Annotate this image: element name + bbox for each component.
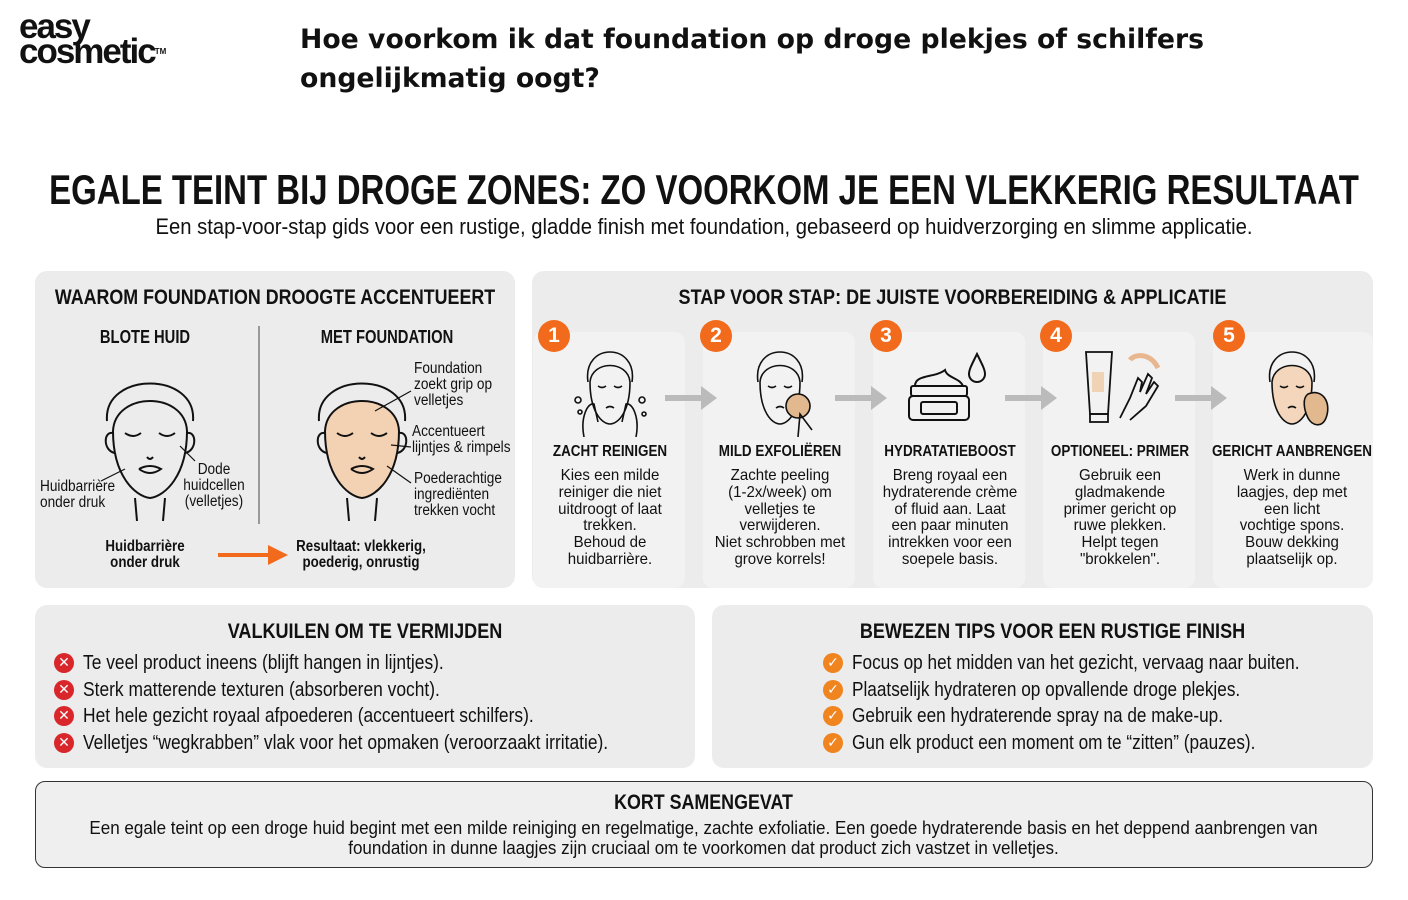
list: ✓ — [827, 682, 839, 698]
step text: huidbarrière. — [568, 551, 652, 568]
step 5: 5 — [1223, 324, 1235, 347]
summary text: Een egale teint op een droge huid begint met een milde reiniging en regelmatige, zachte exfoliatie. Een goede hydraterende basis en het deppend aanbrengen van — [89, 817, 1318, 838]
label: dead cells: (velletjes) — [185, 493, 243, 510]
label: powder: ingrediënten — [414, 486, 489, 503]
icon: cream jar — [908, 352, 986, 421]
heading: BEWEZEN TIPS VOOR EEN RUSTIGE FINISH — [860, 620, 1245, 643]
step text: Kies een milde — [561, 467, 659, 484]
step 3: Breng royaal een — [893, 467, 1007, 484]
step 5 — [1212, 320, 1372, 568]
list: ✓ — [827, 655, 839, 671]
step 5: vochtige spons. — [1240, 517, 1344, 534]
subheading bare skin: BLOTE HUID — [100, 327, 190, 347]
list: ✕ — [58, 682, 70, 698]
step 2: Niet schrobben met — [715, 534, 845, 551]
step 2: Zachte peeling — [731, 467, 829, 484]
panel: pitfalls — [35, 605, 695, 768]
step 3: een paar minuten — [891, 517, 1009, 534]
step 4: 4 — [1050, 324, 1062, 347]
icon: sponge application — [1268, 351, 1329, 426]
step text: reiniger die niet — [559, 484, 661, 501]
list: Te veel product ineens (blijft hangen in lijntjes). — [83, 652, 444, 674]
label: powder — [414, 470, 502, 519]
list — [823, 652, 1299, 754]
label: grip: zoekt grip op — [414, 376, 492, 393]
header question: Hoe voorkom ik dat foundation op droge plekjes of schilfers — [300, 24, 1204, 55]
heading: STAP VOOR STAP: DE JUISTE VOORBEREIDING & APPLICATIE — [679, 286, 1226, 309]
step 1: 1 — [548, 324, 560, 347]
label: grip: Foundation — [414, 360, 482, 377]
label: barrier: Huidbarrière — [40, 478, 115, 495]
icon: bare face — [100, 382, 196, 521]
icon: face with foundation — [316, 382, 412, 521]
heading: VALKUILEN OM TE VERMIJDEN — [228, 620, 502, 643]
logo — [19, 7, 166, 71]
step 3: intrekken voor een — [888, 534, 1012, 551]
list: ✕ — [58, 655, 70, 671]
step 2: (1-2x/week) om — [728, 484, 832, 501]
header question: ongelijkmatig oogt? — [300, 63, 600, 94]
step text: trekken. — [583, 517, 637, 534]
bottom left label: onder druk — [110, 554, 180, 571]
step 2: verwijderen. — [739, 517, 821, 534]
subtitle: Een stap-voor-stap gids voor een rustige, gladde finish met foundation, gebaseerd op huidverzorging en slimme applicatie. — [156, 214, 1252, 239]
summary box — [35, 781, 1373, 868]
list: Focus op het midden van het gezicht, vervaag naar buiten. — [852, 652, 1299, 674]
step 2: 2 — [710, 324, 722, 347]
step 4: Gebruik een — [1079, 467, 1161, 484]
list: Gebruik een hydraterende spray na de make-up. — [852, 705, 1223, 727]
summary text — [89, 817, 1318, 858]
summary heading: KORT SAMENGEVAT — [614, 791, 793, 814]
result label — [296, 538, 426, 571]
list: ✕ — [58, 708, 70, 724]
step 3: of fluid aan. Laat — [894, 501, 1006, 518]
list: Het hele gezicht royaal afpoederen (accentueert schilfers). — [83, 705, 534, 727]
panel: step by step — [532, 271, 1373, 588]
subheading with foundation: MET FOUNDATION — [321, 327, 453, 347]
step 5: een licht — [1264, 501, 1320, 518]
arrow — [218, 545, 288, 565]
step 5: Bouw dekking — [1245, 534, 1339, 551]
list: ✕ — [58, 735, 70, 751]
label: grip — [414, 360, 492, 409]
step 2: MILD EXFOLIËREN — [719, 443, 841, 460]
step 4: ruwe plekken. — [1074, 517, 1166, 534]
label: lines: Accentueert — [412, 423, 485, 440]
step text: uitdroogt of laat — [558, 501, 662, 518]
arrow 2 — [835, 386, 887, 410]
label: grip: velletjes — [414, 392, 463, 409]
step 4: gladmakende — [1075, 484, 1165, 501]
label: powder: Poederachtige — [414, 470, 502, 487]
list: Velletjes “wegkrabben” vlak voor het opmaken (veroorzaakt irritatie). — [83, 732, 608, 754]
heading: WAAROM FOUNDATION DROOGTE ACCENTUEERT — [55, 286, 495, 309]
arrow 4 — [1175, 386, 1227, 410]
step 3: HYDRATATIEBOOST — [884, 443, 1016, 460]
label: powder: trekken vocht — [414, 502, 495, 519]
logo: cosmeticTM — [19, 32, 166, 71]
arrow 3 — [1005, 386, 1057, 410]
list: Gun elk product een moment om te “zitten” (pauzes). — [852, 732, 1255, 754]
result label: poederig, onrustig — [302, 554, 419, 571]
panel: why foundation accentuates dryness — [35, 271, 515, 588]
panel: tips — [712, 605, 1373, 768]
result label: Resultaat: vlekkerig, — [296, 538, 426, 555]
step 3: 3 — [880, 324, 892, 347]
bottom left label: Huidbarrière — [105, 538, 185, 555]
list — [54, 652, 608, 754]
logo: easy — [19, 7, 89, 46]
step 2: velletjes te — [744, 501, 816, 518]
step 4 — [1040, 320, 1189, 568]
summary text: foundation in dunne laagjes zijn cruciaal om te voorkomen dat product zich vastzet in velletjes. — [348, 837, 1059, 858]
label: dead cells: Dode — [198, 461, 230, 478]
step 3: hydraterende crème — [883, 484, 1017, 501]
step 2 — [700, 320, 846, 568]
label: lines — [412, 423, 511, 456]
step 5: GERICHT AANBRENGEN — [1212, 443, 1372, 460]
icon: washing face — [574, 351, 647, 437]
arrow 1 — [665, 386, 717, 410]
list: Plaatselijk hydrateren op opvallende droge plekjes. — [852, 678, 1240, 700]
step text: Behoud de — [574, 534, 646, 551]
header question — [300, 24, 1204, 94]
step 5: Werk in dunne — [1244, 467, 1340, 484]
bottom left label — [105, 538, 185, 571]
label: barrier: onder druk — [40, 494, 105, 511]
title: EGALE TEINT BIJ DROGE ZONES: ZO VOORKOM JE EEN VLEKKERIG RESULTAAT — [49, 166, 1359, 213]
step 5: plaatselijk op. — [1246, 551, 1338, 568]
step 4: Helpt tegen — [1082, 534, 1158, 551]
step 1 — [538, 320, 667, 568]
label: barrier — [40, 478, 115, 511]
list: ✓ — [827, 735, 839, 751]
step 4: primer gericht op — [1064, 501, 1176, 518]
step 4: OPTIONEEL: PRIMER — [1051, 443, 1189, 460]
list: Sterk matterende texturen (absorberen vocht). — [83, 678, 440, 700]
label: lines: lijntjes & rimpels — [412, 439, 511, 456]
step text — [558, 467, 662, 568]
icon: primer tube and hand — [1085, 351, 1160, 423]
step title: ZACHT REINIGEN — [553, 443, 667, 460]
step 2: grove korrels! — [734, 551, 826, 568]
step 5: laagjes, dep met — [1237, 484, 1347, 501]
label: dead cells — [183, 461, 245, 510]
step 4: "brokkelen". — [1080, 551, 1160, 568]
list: ✓ — [827, 708, 839, 724]
step 3: soepele basis. — [902, 551, 998, 568]
icon: exfoliating — [756, 351, 813, 437]
step 3 — [870, 320, 1017, 568]
label: dead cells: huidcellen — [183, 477, 245, 494]
